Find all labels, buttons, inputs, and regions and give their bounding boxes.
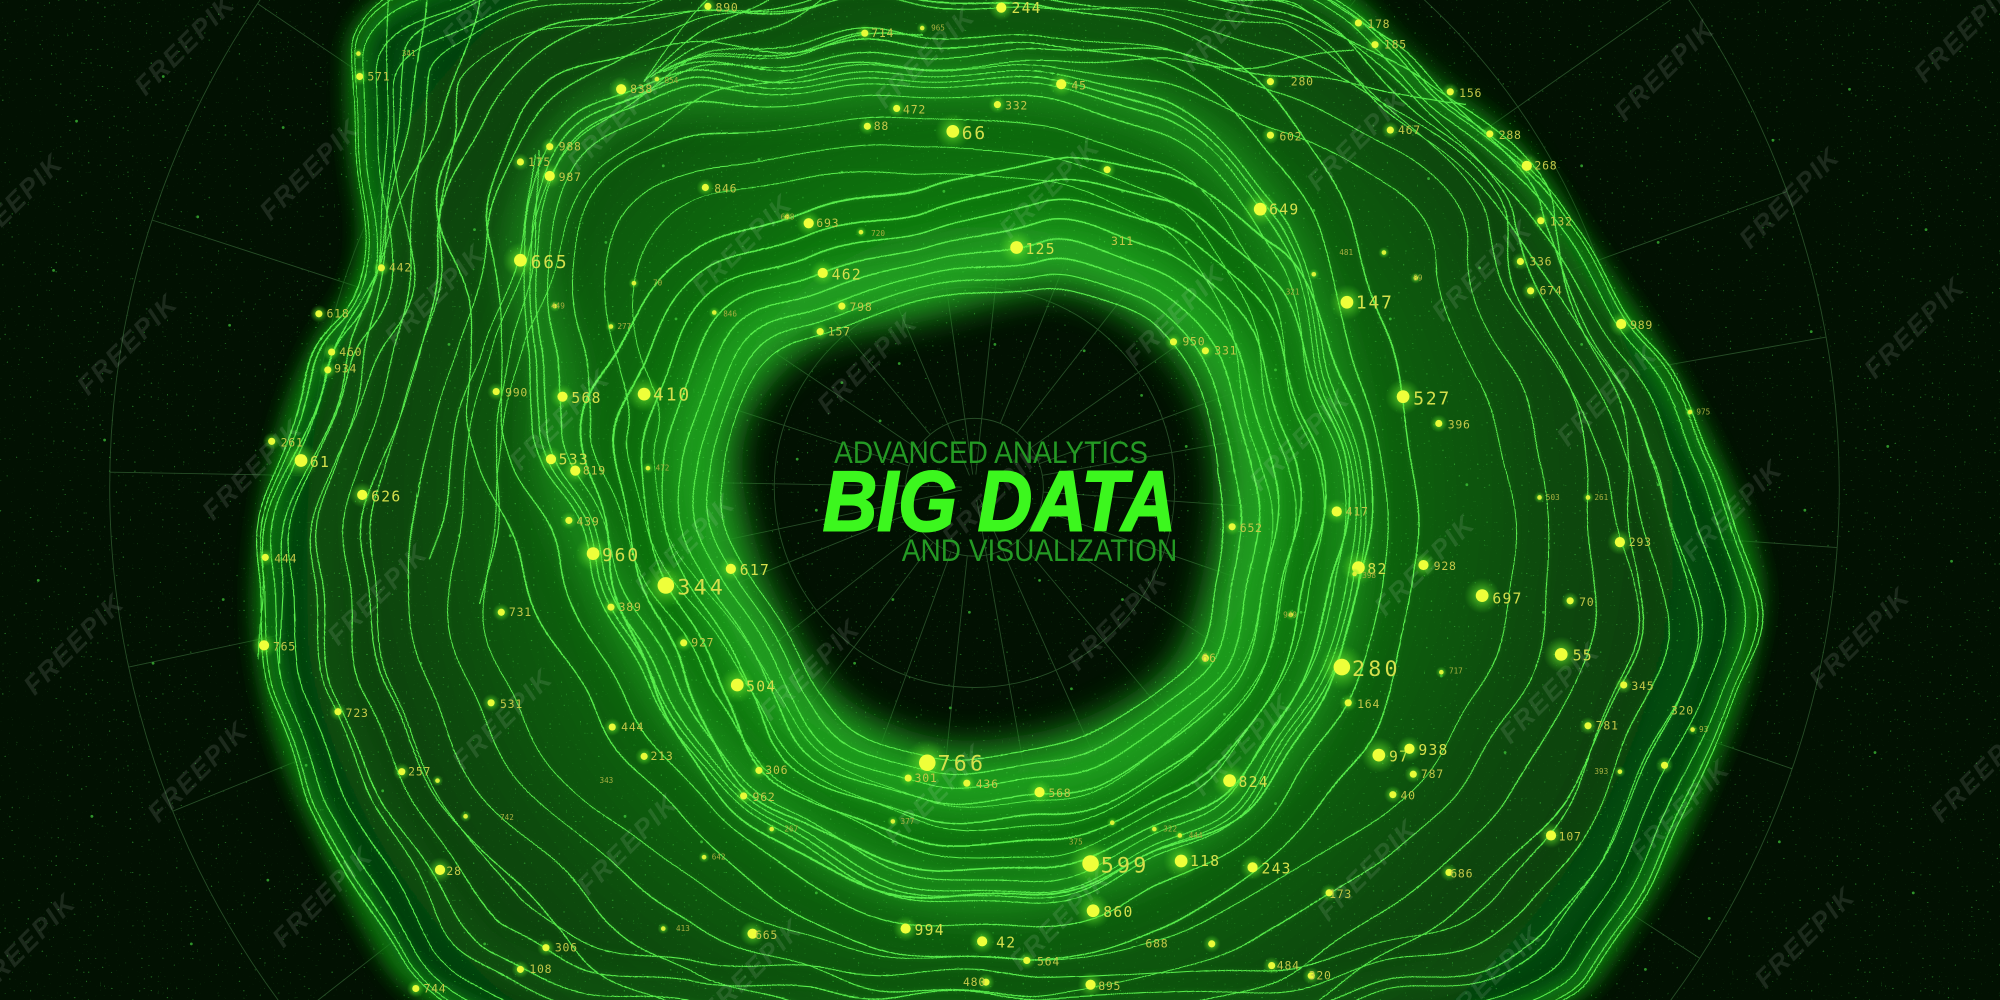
data points: tiny: 93 bbox=[1699, 725, 1709, 734]
data points: medium: 665 bbox=[755, 928, 778, 942]
data points: medium: 838 bbox=[630, 82, 653, 96]
data points: medium: 42 bbox=[996, 935, 1016, 952]
data points: small: 988 bbox=[559, 140, 582, 154]
data points: small: 173 bbox=[1329, 887, 1352, 901]
data points: medium: 417 bbox=[1346, 504, 1369, 518]
data points: tiny: 341 bbox=[402, 49, 416, 58]
data points: large: 125 bbox=[1026, 241, 1056, 258]
data points: medium: 243 bbox=[1261, 861, 1292, 878]
watermarks: FREEPIK bbox=[1061, 564, 1174, 676]
data points: small: 306 bbox=[765, 763, 788, 777]
watermarks: FREEPIK bbox=[196, 413, 309, 526]
data points: tiny: 720 bbox=[871, 229, 885, 238]
data points: medium: 938 bbox=[1418, 742, 1449, 759]
data points: large: 504 bbox=[746, 678, 776, 695]
data points: small: 444 bbox=[274, 551, 297, 565]
data points: small: 688 bbox=[1145, 937, 1168, 951]
data points: small: 442 bbox=[389, 261, 412, 275]
data points: medium: 895 bbox=[1098, 979, 1121, 993]
data points: small: 460 bbox=[339, 345, 362, 359]
data points: tiny: 642 bbox=[712, 853, 726, 862]
watermarks: FREEPIK bbox=[1676, 454, 1789, 567]
data points: small: 934 bbox=[334, 361, 357, 375]
data points: extra large: 280 bbox=[1352, 657, 1401, 682]
glowing ring body bbox=[266, 0, 1750, 1000]
data points: medium: 693 bbox=[816, 216, 839, 230]
data points: tiny: 413 bbox=[676, 924, 690, 933]
data points: tiny: 854 bbox=[665, 76, 679, 85]
watermarks: FREEPIK bbox=[811, 307, 924, 420]
data points: small: 571 bbox=[367, 69, 390, 83]
data points: large bbox=[283, 114, 1593, 929]
data points: medium: 765 bbox=[273, 640, 296, 654]
watermarks: FREEPIK bbox=[1493, 636, 1606, 749]
data points: tiny: 481 bbox=[1339, 248, 1353, 257]
data points: tiny: 398 bbox=[1362, 571, 1376, 580]
watermarks: FREEPIK bbox=[1733, 141, 1846, 254]
data points: small bbox=[256, 0, 1694, 997]
watermarks: FREEPIK bbox=[629, 488, 741, 601]
data points: tiny: 965 bbox=[931, 24, 945, 33]
data points: medium: 462 bbox=[832, 266, 862, 283]
data points: tiny: 742 bbox=[500, 813, 514, 822]
data points: small: 472 bbox=[903, 103, 926, 117]
watermarks: FREEPIK bbox=[1749, 881, 1861, 994]
data points: medium: 533 bbox=[559, 451, 589, 468]
data points: small: 467 bbox=[1398, 123, 1421, 137]
data points: tiny: 975 bbox=[1696, 408, 1710, 417]
data points: large: 697 bbox=[1492, 590, 1523, 607]
data points: large: 960 bbox=[602, 545, 640, 566]
data points: tiny: 444 bbox=[1189, 831, 1203, 840]
contour lines bbox=[261, 0, 1755, 1000]
data points: extra large: 344 bbox=[677, 575, 726, 600]
data points: small: 288 bbox=[1499, 128, 1522, 142]
data points: small: 686 bbox=[1450, 867, 1473, 881]
data points: extra large: 766 bbox=[938, 751, 986, 776]
data points: tiny: 393 bbox=[1594, 767, 1609, 776]
data points: small: 389 bbox=[619, 600, 642, 614]
data points: medium bbox=[251, 0, 1653, 997]
data points: tiny: 949 bbox=[1283, 610, 1297, 619]
data points: tiny: 377 bbox=[901, 817, 915, 826]
title line: and visualization: AND VISUALIZATION bbox=[902, 532, 1177, 568]
watermarks: FREEPIK bbox=[571, 788, 684, 901]
data points: small: 950 bbox=[1182, 335, 1205, 349]
data points: medium: 568 bbox=[1048, 786, 1071, 800]
data points: large: 147 bbox=[1356, 293, 1394, 314]
data points: small: 714 bbox=[871, 26, 894, 40]
outer contour family bbox=[262, 0, 1755, 1000]
data points: medium: 989 bbox=[1630, 318, 1653, 332]
title line: big data: BIG DATA bbox=[823, 455, 1176, 550]
contour line glow bbox=[261, 0, 1755, 1000]
watermarks: FREEPIK bbox=[1004, 863, 1116, 976]
data points: large: 82 bbox=[1367, 561, 1388, 578]
data points: small: 723 bbox=[346, 706, 369, 720]
data points: small: 731 bbox=[509, 605, 532, 619]
watermarks: FREEPIK bbox=[936, 439, 1049, 551]
watermarks: FREEPIK bbox=[1608, 14, 1721, 127]
data points: small: 301 bbox=[915, 771, 938, 785]
data points: large: 824 bbox=[1239, 774, 1269, 791]
data points: small: 261 bbox=[281, 435, 304, 449]
data points: tiny: 846 bbox=[723, 309, 737, 318]
data points: medium: 244 bbox=[1011, 0, 1042, 17]
data points: tiny: 343 bbox=[599, 776, 614, 785]
data points: small: 781 bbox=[1596, 719, 1619, 733]
data points: small: 890 bbox=[716, 0, 739, 14]
watermarks: FREEPIK bbox=[141, 715, 254, 828]
data points: small: 306 bbox=[555, 941, 578, 955]
data points: small: 70 bbox=[1579, 595, 1594, 609]
data points: tiny: 503 bbox=[1546, 493, 1560, 502]
data points: small: 345 bbox=[1631, 679, 1654, 693]
data points: medium: 268 bbox=[1534, 159, 1557, 173]
data points: small: 927 bbox=[691, 636, 714, 650]
data points: small: 40 bbox=[1401, 789, 1416, 803]
data points: tiny: 449 bbox=[551, 302, 565, 311]
data points: tiny: 375 bbox=[1069, 837, 1083, 846]
data points: extra large: 599 bbox=[1101, 853, 1149, 878]
data points: large: 118 bbox=[1190, 853, 1220, 870]
data points: medium: 987 bbox=[559, 170, 582, 184]
bright band bundles bbox=[266, 0, 1750, 1000]
data points: medium: 568 bbox=[571, 390, 602, 407]
data points: small: 178 bbox=[1367, 17, 1390, 31]
watermarks: FREEPIK bbox=[868, 1, 981, 114]
data points: medium: 293 bbox=[1629, 535, 1652, 549]
data points: large: 527 bbox=[1413, 388, 1451, 409]
data points: tiny: 321 bbox=[1286, 288, 1300, 297]
data points: small: 436 bbox=[976, 777, 999, 791]
data points: small: 439 bbox=[577, 515, 600, 529]
watermarks: FREEPIK bbox=[1368, 509, 1481, 621]
data points: small: 484 bbox=[1277, 958, 1300, 972]
data points: tiny: 608 bbox=[781, 212, 795, 221]
data points: tiny: 277 bbox=[617, 322, 632, 331]
data points: small: 320 bbox=[1309, 969, 1332, 983]
data points: small: 480 bbox=[963, 975, 986, 989]
data points: small: 257 bbox=[408, 765, 431, 779]
data points: small: 175 bbox=[528, 155, 551, 169]
watermarks: FREEPIK bbox=[1301, 84, 1414, 197]
data points: small: 88 bbox=[874, 119, 889, 133]
ring base fill bbox=[266, 0, 1750, 1000]
data points: small: 846 bbox=[714, 182, 737, 196]
data points: medium: 45 bbox=[1071, 78, 1087, 92]
data points: small: 990 bbox=[505, 386, 528, 400]
data points: small: 280 bbox=[1291, 74, 1314, 88]
data points: small: 787 bbox=[1421, 767, 1444, 781]
data points: small: 652 bbox=[1240, 521, 1263, 535]
watermarks: FREEPIK bbox=[266, 840, 379, 953]
fan strands bbox=[261, 0, 1467, 663]
data points: small: 156 bbox=[1459, 86, 1482, 100]
data points: large: 97 bbox=[1389, 748, 1409, 765]
data points: small: 336 bbox=[1529, 254, 1552, 268]
data points: extra large bbox=[643, 562, 1401, 886]
data points: small: 320 bbox=[1671, 703, 1694, 717]
data points: small: 157 bbox=[828, 324, 851, 338]
data points: small: 213 bbox=[651, 749, 674, 763]
data points: small: 531 bbox=[500, 697, 523, 711]
watermarks: FREEPIK bbox=[1118, 259, 1231, 371]
data points: large: 665 bbox=[531, 252, 569, 273]
data points: large: 61 bbox=[310, 454, 330, 471]
watermarks: FREEPIK bbox=[1624, 754, 1736, 866]
data points: small: 962 bbox=[753, 790, 776, 804]
data points: small: 164 bbox=[1357, 697, 1380, 711]
data points: small: 66 bbox=[1202, 651, 1217, 665]
watermarks: FREEPIK bbox=[1311, 814, 1424, 926]
data points: small: 602 bbox=[1279, 129, 1302, 143]
data points: large: 860 bbox=[1103, 904, 1134, 921]
data points: small: 744 bbox=[423, 981, 446, 995]
data points: tiny: 89 bbox=[1413, 274, 1423, 283]
watermarks: FREEPIK bbox=[379, 238, 491, 351]
watermarks: FREEPIK bbox=[879, 738, 991, 851]
data points: large: 649 bbox=[1269, 201, 1299, 218]
data points: large: 55 bbox=[1573, 648, 1593, 665]
watermarks: FREEPIK bbox=[1186, 689, 1299, 801]
data points: small: 108 bbox=[529, 962, 552, 976]
data points: medium: 994 bbox=[915, 922, 945, 939]
data points: tiny: 322 bbox=[1163, 825, 1177, 834]
data points: medium: 107 bbox=[1559, 830, 1582, 844]
watermarks: FREEPIK bbox=[754, 613, 866, 726]
watermarks: FREEPIK bbox=[993, 131, 1106, 244]
data points: medium: 819 bbox=[583, 463, 606, 477]
data points: tiny: 717 bbox=[1449, 666, 1463, 675]
data points: small: 332 bbox=[1005, 99, 1028, 113]
data points: small: 396 bbox=[1448, 418, 1471, 432]
data points: small: 618 bbox=[327, 307, 350, 321]
data points: small: 185 bbox=[1384, 37, 1407, 51]
data points: medium: 928 bbox=[1434, 559, 1457, 573]
watermarks: FREEPIK bbox=[446, 663, 559, 776]
data points: small: 311 bbox=[1111, 234, 1134, 248]
data points: small: 132 bbox=[1550, 215, 1573, 229]
watermarks: FREEPIK bbox=[1551, 339, 1664, 452]
watermarks: FREEPIK bbox=[504, 363, 616, 476]
watermarks: FREEPIK bbox=[1243, 384, 1356, 496]
watermarks: FREEPIK bbox=[561, 64, 674, 176]
data points: tiny: 70 bbox=[653, 279, 663, 288]
watermarks: FREEPIK bbox=[1858, 271, 1971, 384]
inner contour family bbox=[585, 154, 1366, 897]
data points: tiny: 472 bbox=[656, 464, 669, 473]
data points: large: 66 bbox=[962, 123, 987, 144]
middle contour family bbox=[443, 1, 1417, 966]
watermarks: FREEPIK bbox=[254, 113, 366, 226]
watermarks: FREEPIK bbox=[1426, 214, 1539, 327]
watermarks: FREEPIK bbox=[321, 538, 434, 651]
data points: small: 798 bbox=[849, 300, 873, 314]
data points: medium: 28 bbox=[446, 864, 462, 878]
title bbox=[823, 435, 1177, 568]
data points: medium: 617 bbox=[740, 562, 770, 579]
title line: advanced analytics: ADVANCED ANALYTICS bbox=[834, 435, 1148, 470]
data points: small: 674 bbox=[1540, 284, 1563, 298]
watermarks: FREEPIK bbox=[686, 189, 799, 301]
data points: tiny: 267 bbox=[784, 825, 799, 834]
data points: small: 444 bbox=[621, 720, 644, 734]
data points: small: 331 bbox=[1214, 344, 1237, 358]
watermarks: FREEPIK bbox=[71, 288, 184, 401]
data points: tiny bbox=[353, 22, 1710, 934]
data points: large: 410 bbox=[653, 385, 691, 406]
data points: medium: 626 bbox=[371, 488, 401, 505]
data points: small: 564 bbox=[1037, 955, 1060, 969]
watermarks: FREEPIK bbox=[1803, 581, 1916, 694]
data points: tiny: 261 bbox=[1594, 493, 1609, 502]
watermarks: FREEPIK bbox=[18, 588, 130, 701]
